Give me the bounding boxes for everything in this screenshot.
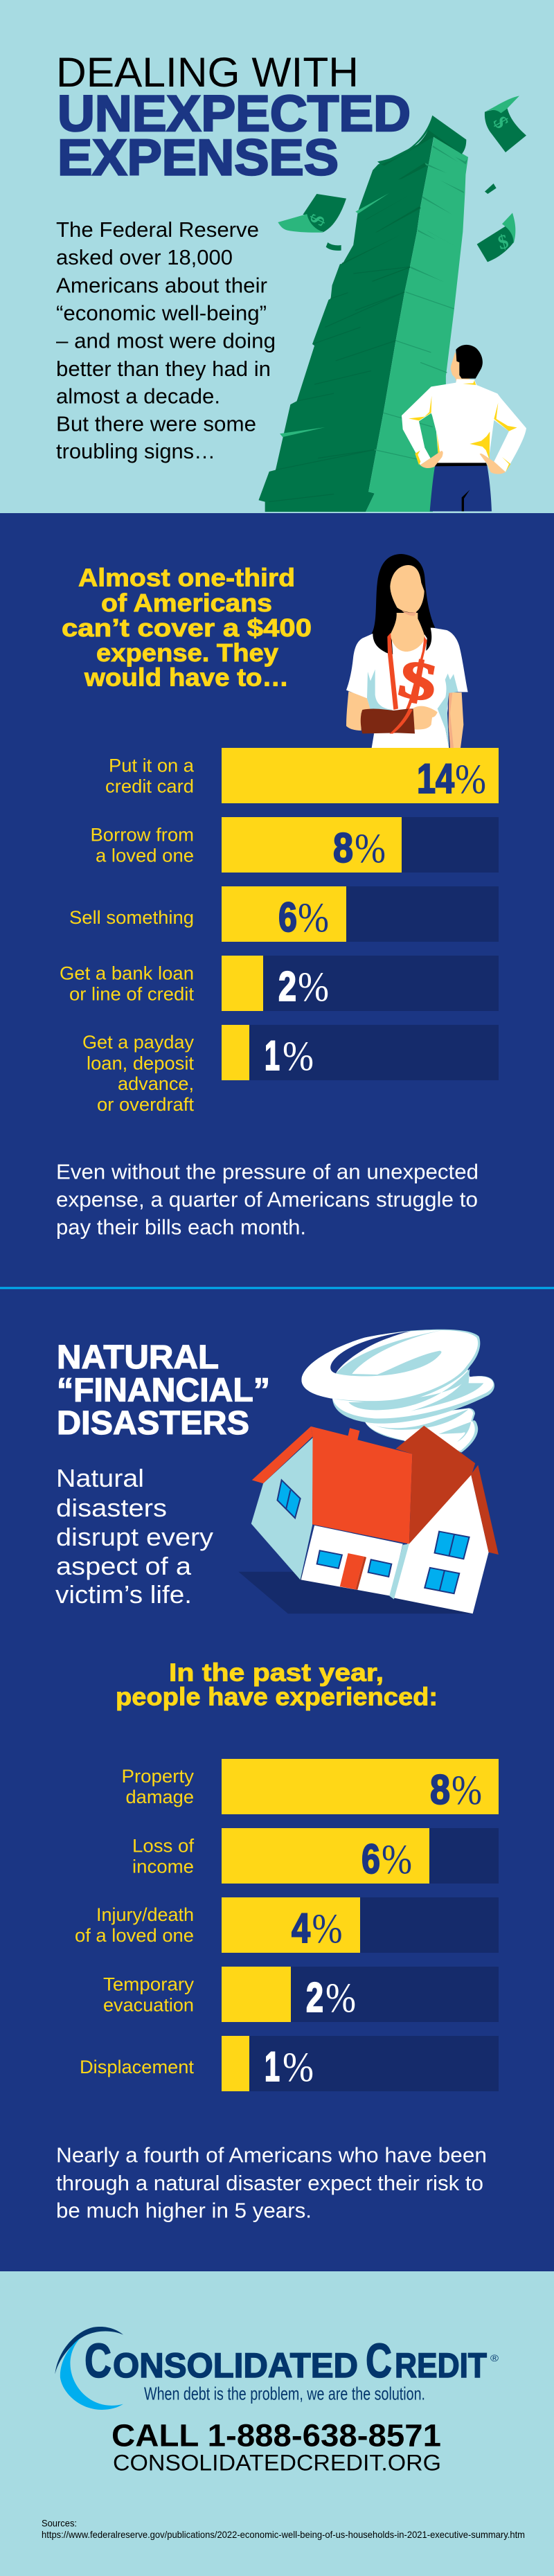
text block: disasters disrupt: Natural bbox=[56, 1464, 144, 1492]
title: DEALING WITH bbox=[56, 49, 359, 96]
bar: loss of income 6%: % bbox=[382, 1836, 412, 1882]
heading: natural financial disasters bbox=[57, 1339, 270, 1442]
bar: loved one 8%: Borrow from bbox=[90, 824, 194, 845]
bar: loss of income 6%: 6 bbox=[361, 1836, 380, 1882]
bar: bank loan 2%: % bbox=[298, 964, 329, 1010]
text block: bills struggle: pay their bills each month. bbox=[56, 1215, 306, 1240]
bar: loved one 8%: % bbox=[355, 825, 386, 871]
intro text block: The Federal Reserve bbox=[56, 217, 259, 242]
heading: almost one-third: of Americans bbox=[101, 589, 272, 617]
bar: bank loan 2%: or line of credit bbox=[69, 983, 194, 1004]
text block: risk expectation: be much higher in 5 years. bbox=[56, 2198, 312, 2223]
heading: almost one-third: Almost one-third bbox=[78, 564, 295, 591]
panel: intro bbox=[0, 0, 554, 514]
text block: disasters disrupt: aspect of a bbox=[56, 1552, 192, 1580]
bar: temporary evacuation 2%: % bbox=[325, 1975, 356, 2021]
bar: bank loan 2%: Get a bank loan bbox=[60, 963, 194, 983]
panel: natural disasters section bbox=[0, 1289, 554, 2271]
bar: temporary evacuation 2%: 2 bbox=[306, 1974, 323, 2021]
intro text block bbox=[56, 217, 276, 463]
bar: sell something 6%: 6 bbox=[278, 894, 297, 940]
bar: sell something 6%: Sell something bbox=[69, 907, 194, 928]
bar: displacement 1%: Displacement bbox=[80, 2057, 194, 2077]
bar: property damage 8%: Property bbox=[122, 1766, 195, 1787]
bar: payday loan 1%: % bbox=[283, 1033, 314, 1079]
text block: risk expectation: Nearly a fourth of Americans who have been bbox=[56, 2143, 487, 2167]
intro text block: But there were some bbox=[56, 411, 256, 436]
text block: disasters disrupt: disrupt every bbox=[56, 1523, 213, 1551]
bar: displacement 1%: 1 bbox=[265, 2043, 280, 2090]
illustration: tornado lifting a house bbox=[238, 1330, 499, 1613]
title: EXPENSES bbox=[57, 130, 339, 186]
bar: property damage 8% bbox=[122, 1759, 499, 1814]
heading: almost one-third: would have to… bbox=[84, 663, 289, 691]
heading: almost one-third: expense. They bbox=[96, 638, 278, 667]
logo: Consolidated Credit: When debt is the problem, we are the solution. bbox=[144, 2383, 425, 2404]
bar: payday loan 1%: advance, bbox=[118, 1073, 194, 1094]
illustration: stack of money bbox=[258, 116, 468, 512]
logo: Consolidated Credit: C bbox=[366, 2334, 392, 2388]
bar: payday loan 1% bbox=[82, 1025, 499, 1115]
bar: credit card 14%: credit card bbox=[105, 776, 194, 796]
text block: bills struggle: Even without the pressure of an unexpected bbox=[56, 1159, 479, 1184]
illustration: flying dollar bills: $ bbox=[489, 113, 512, 132]
bar: payday loan 1%: Get a payday bbox=[82, 1032, 194, 1053]
heading: natural financial disasters: “FINANCIAL” bbox=[57, 1372, 270, 1408]
bar: injury or death 4%: % bbox=[312, 1906, 342, 1951]
bar: loss of income 6% bbox=[132, 1828, 499, 1884]
intro text block: “economic well-being” bbox=[56, 301, 267, 325]
bar: temporary evacuation 2%: Temporary bbox=[103, 1974, 195, 1994]
bar chart: how people would cover a $400 expense bbox=[60, 748, 499, 1115]
heading: natural financial disasters: DISASTERS bbox=[57, 1405, 249, 1442]
title: UNEXPECTED bbox=[57, 86, 411, 142]
illustration: man looking up bbox=[402, 345, 526, 511]
bar: property damage 8%: 8 bbox=[430, 1766, 450, 1813]
bar: credit card 14% bbox=[105, 748, 499, 803]
bar: injury or death 4%: of a loved one bbox=[75, 1925, 194, 1946]
illustration: flying dollar bills bbox=[278, 96, 526, 262]
text block: bills struggle bbox=[56, 1159, 479, 1240]
text block: risk expectation: through a natural disaster expect their risk to bbox=[56, 2171, 483, 2195]
panel: credit card section bbox=[0, 513, 554, 1288]
dollar sign on shirt: $ bbox=[394, 647, 442, 713]
bar: credit card 14%: 14 bbox=[417, 755, 455, 802]
heading: in the past year: In the past year, bbox=[169, 1658, 384, 1687]
text block: disasters disrupt: disasters bbox=[56, 1494, 167, 1522]
sources: https://www.federalreserve.gov/publications/2022-economic-well-being-of-us-households-in-2021-executive-summary.htm bbox=[42, 2529, 525, 2540]
bar chart: disaster experiences bbox=[75, 1759, 499, 2091]
logo: Consolidated Credit: C bbox=[84, 2334, 111, 2388]
intro text block: asked over 18,000 bbox=[56, 245, 233, 269]
intro text block: Americans about their bbox=[56, 273, 267, 298]
bar: payday loan 1%: loan, deposit bbox=[87, 1053, 194, 1073]
bar: loved one 8%: 8 bbox=[333, 825, 353, 871]
text block: bills struggle: expense, a quarter of Americans struggle to bbox=[56, 1187, 478, 1212]
text block: disasters disrupt: victim’s life. bbox=[55, 1580, 192, 1609]
text block: risk expectation bbox=[56, 2143, 487, 2223]
sources: Sources: bbox=[42, 2518, 77, 2529]
bar: loved one 8% bbox=[90, 817, 499, 873]
heading: in the past year bbox=[116, 1658, 438, 1710]
bar: sell something 6%: % bbox=[298, 895, 329, 940]
bar: temporary evacuation 2% bbox=[103, 1967, 499, 2022]
bar: bank loan 2%: 2 bbox=[278, 963, 296, 1010]
intro text block: almost a decade. bbox=[56, 384, 220, 409]
bar: credit card 14%: Put it on a bbox=[109, 755, 195, 776]
logo: Consolidated Credit bbox=[55, 2327, 499, 2410]
call to action: CALL 1-888-638-8571 bbox=[111, 2418, 441, 2453]
bar: injury or death 4%: 4 bbox=[292, 1905, 311, 1951]
panel: footer bbox=[0, 2271, 554, 2576]
illustration: flying dollar bills: $ bbox=[305, 211, 330, 229]
title bbox=[56, 49, 411, 186]
text block: disasters disrupt bbox=[55, 1464, 213, 1609]
bar: injury or death 4% bbox=[75, 1897, 499, 1953]
heading: almost one-third: can’t cover a $400 bbox=[62, 614, 312, 642]
bar: property damage 8%: % bbox=[452, 1767, 482, 1813]
logo: Consolidated Credit: ® bbox=[490, 2352, 499, 2363]
bar: payday loan 1%: or overdraft bbox=[97, 1094, 195, 1115]
bar: loss of income 6%: income bbox=[132, 1856, 194, 1877]
bar: sell something 6% bbox=[69, 886, 499, 942]
illustration: woman with arm in sling bbox=[346, 554, 468, 748]
logo: Consolidated Credit: ONSOLIDATED bbox=[113, 2346, 358, 2385]
bar: payday loan 1%: 1 bbox=[265, 1032, 280, 1079]
heading: natural financial disasters: NATURAL bbox=[57, 1339, 219, 1376]
intro text block: better than they had in bbox=[56, 357, 271, 381]
call to action bbox=[111, 2418, 441, 2475]
bar: temporary evacuation 2%: evacuation bbox=[103, 1994, 194, 2015]
bar: displacement 1% bbox=[80, 2036, 499, 2091]
sources bbox=[42, 2518, 525, 2540]
intro text block: – and most were doing bbox=[56, 328, 276, 353]
call to action: CONSOLIDATEDCREDIT.ORG bbox=[113, 2450, 441, 2475]
bar: loss of income 6%: Loss of bbox=[132, 1835, 194, 1856]
bar: property damage 8%: damage bbox=[126, 1787, 194, 1807]
logo: Consolidated Credit: REDIT bbox=[395, 2346, 487, 2385]
bar: bank loan 2% bbox=[60, 956, 499, 1011]
bar: loved one 8%: a loved one bbox=[96, 845, 194, 866]
illustration: flying dollar bills: $ bbox=[496, 230, 511, 254]
intro text block: troubling signs… bbox=[56, 439, 215, 463]
heading: in the past year: people have experienced: bbox=[116, 1683, 438, 1710]
bar: credit card 14%: % bbox=[455, 756, 486, 802]
bar: displacement 1%: % bbox=[283, 2044, 314, 2090]
bar: injury or death 4%: Injury/death bbox=[96, 1904, 194, 1925]
heading: almost one-third bbox=[62, 564, 312, 691]
